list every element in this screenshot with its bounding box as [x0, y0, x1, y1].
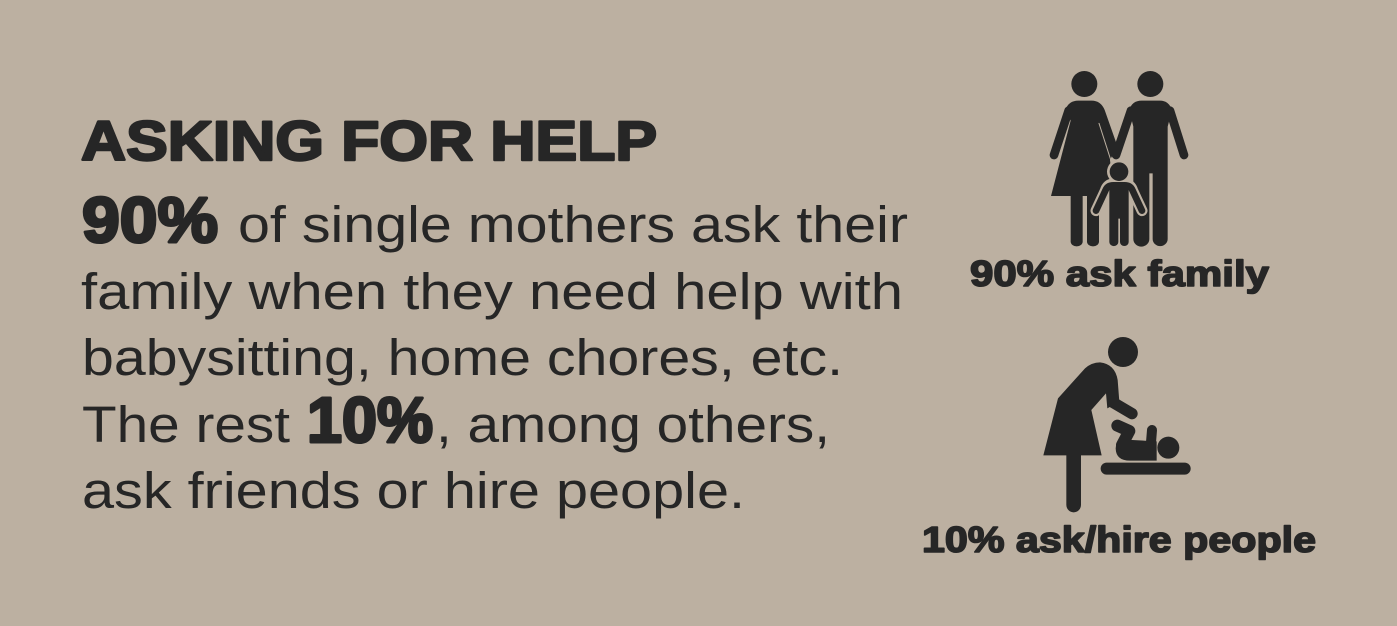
mother [1043, 337, 1138, 512]
woman [1051, 71, 1117, 246]
title: ASKING FOR HELP [81, 109, 657, 172]
paragraph text block: of single mothers ask their [238, 196, 908, 253]
icon: family [1051, 71, 1184, 248]
label: 10% ask/hire people: 10% ask/hire people [922, 519, 1316, 560]
paragraph text block: 90% [82, 184, 218, 256]
paragraph text block: ask friends or hire people. [82, 462, 745, 519]
label: 90% ask family: 90% ask family [970, 253, 1269, 294]
child [1096, 160, 1142, 248]
paragraph text block: 10% [307, 384, 433, 456]
icon: mother changing baby [1043, 337, 1185, 512]
paragraph text block: babysitting, home chores, etc. [82, 329, 843, 386]
paragraph text block: , among others, [436, 396, 830, 453]
paragraph text block: The rest [82, 396, 290, 453]
paragraph text block: family when they need help with [81, 263, 903, 320]
man [1116, 71, 1184, 247]
paragraph text block [81, 184, 908, 519]
changing table [1107, 451, 1185, 487]
baby [1116, 426, 1179, 461]
